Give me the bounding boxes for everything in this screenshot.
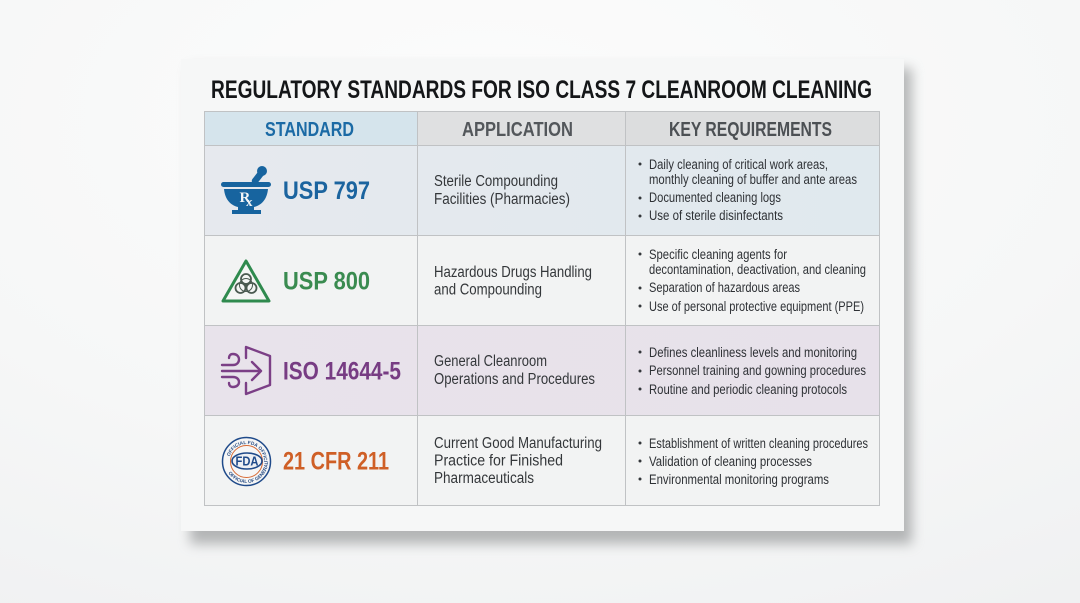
row: USP 800: Use of personal protective equipment (PPE) bbox=[649, 299, 864, 314]
row: USP 800: Separation of hazardous areas bbox=[649, 280, 800, 295]
row: USP 797 bbox=[204, 146, 880, 236]
icon: mortar and pestle: x bbox=[246, 194, 253, 209]
row: ISO 14644-5 bbox=[204, 326, 880, 416]
row: 21 CFR 211: 21 CFR 211 bbox=[283, 448, 389, 476]
row: ISO 14644-5: Operations and Procedures bbox=[434, 371, 595, 388]
row: 21 CFR 211: Pharmaceuticals bbox=[434, 470, 534, 487]
row: ISO 14644-5: Personnel training and gowning procedures bbox=[649, 363, 866, 378]
row: USP 797: USP 797 bbox=[283, 177, 370, 205]
row: USP 797: Daily cleaning of critical work areas, bbox=[649, 157, 828, 172]
row: USP 797: monthly cleaning of buffer and ante areas bbox=[649, 172, 857, 187]
row: USP 800: Specific cleaning agents for bbox=[649, 247, 787, 262]
row: ISO 14644-5: ISO 14644-5 bbox=[283, 358, 401, 386]
row: 21 CFR 211: Current Good Manufacturing bbox=[434, 435, 602, 452]
row: 21 CFR 211: Practice for Finished bbox=[434, 452, 563, 470]
row: USP 797: Use of sterile disinfectants bbox=[649, 208, 783, 223]
icon: mortar and pestle bbox=[221, 166, 271, 214]
icon: airflow door bbox=[222, 347, 270, 394]
icon: biohazard triangle bbox=[223, 261, 269, 301]
table header: KEY REQUIREMENTS bbox=[669, 119, 832, 141]
icon: FDA seal: OFFICIAL OF GENERAL bbox=[228, 462, 268, 483]
row: USP 800: and Compounding bbox=[434, 282, 542, 298]
row: USP 800: USP 800 bbox=[283, 268, 370, 296]
row: USP 797: Facilities (Pharmacies) bbox=[434, 191, 570, 208]
table header: STANDARD bbox=[265, 119, 354, 141]
row: 21 CFR 211 bbox=[222, 435, 868, 487]
row: USP 800 bbox=[204, 236, 880, 326]
icon: FDA seal bbox=[222, 436, 272, 486]
row: USP 800: Hazardous Drugs Handling bbox=[434, 264, 592, 281]
row: USP 797: Documented cleaning logs bbox=[649, 190, 781, 205]
row: 21 CFR 211: Environmental monitoring programs bbox=[649, 472, 829, 487]
title: REGULATORY STANDARDS FOR ISO CLASS 7 CLEANROOM CLEANING bbox=[211, 76, 872, 104]
table bbox=[204, 111, 880, 506]
row: ISO 14644-5: Defines cleanliness levels and monitoring bbox=[649, 345, 857, 360]
table header bbox=[204, 112, 880, 146]
icon: mortar and pestle: R bbox=[240, 190, 250, 206]
icon: FDA seal: OFFICIAL FDA OFFICIAL bbox=[227, 440, 268, 462]
icon: FDA seal: FDA bbox=[236, 454, 259, 468]
row: ISO 14644-5: General Cleanroom bbox=[434, 353, 547, 370]
row: USP 797: Sterile Compounding bbox=[434, 173, 558, 190]
row: ISO 14644-5: Routine and periodic cleaning protocols bbox=[649, 382, 847, 397]
table header: APPLICATION bbox=[462, 119, 573, 141]
row: 21 CFR 211: Validation of cleaning processes bbox=[649, 454, 812, 469]
row: USP 800: decontamination, deactivation, and cleaning bbox=[649, 262, 866, 277]
panel: card bbox=[181, 59, 912, 544]
row: 21 CFR 211: Establishment of written cleaning procedures bbox=[649, 436, 868, 451]
